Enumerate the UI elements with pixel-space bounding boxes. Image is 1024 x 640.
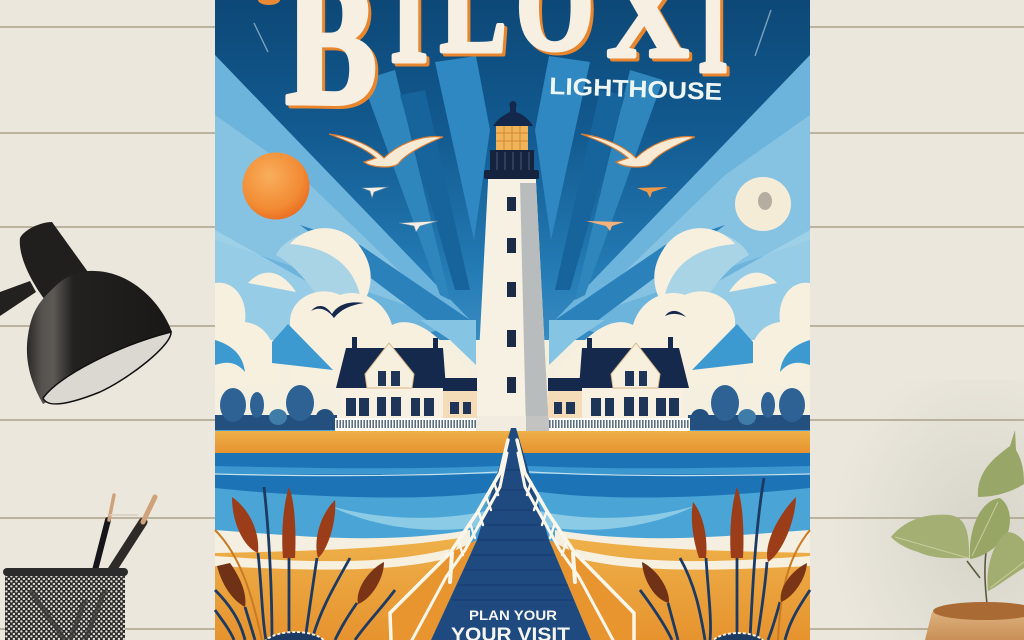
orange sun	[242, 152, 310, 220]
subtitle: LIGHTHOUSE: LIGHTHOUSE	[549, 73, 723, 106]
terracotta pot	[925, 602, 1024, 640]
house left	[335, 337, 477, 431]
right railing	[517, 440, 634, 640]
seagulls	[311, 134, 695, 318]
cream moon ball	[735, 177, 791, 231]
small orange disc at top edge	[258, 0, 280, 5]
title: BILOXI	[285, 0, 728, 142]
house right	[548, 337, 690, 431]
potted plant	[891, 430, 1024, 640]
pebble circle	[711, 633, 765, 640]
desk lamp	[0, 222, 172, 404]
leaves and stem	[891, 430, 1024, 604]
background trees	[215, 385, 337, 430]
lamp opening	[43, 332, 171, 404]
water waves	[215, 453, 810, 555]
sky with sun rays	[215, 0, 810, 440]
decorative faint birds near title	[254, 10, 771, 56]
side panels	[390, 540, 477, 640]
lamp arm	[0, 281, 36, 316]
foreground sand	[215, 538, 810, 640]
mesh cup	[5, 572, 125, 640]
pens	[67, 495, 155, 640]
clouds	[215, 228, 810, 430]
left railing	[390, 440, 508, 640]
walkway deck	[431, 428, 591, 640]
pen holder	[3, 495, 155, 640]
right cattails	[640, 478, 810, 640]
call to action text	[451, 607, 570, 640]
sandy beach strip	[215, 431, 810, 453]
background trees right	[688, 385, 810, 430]
pebble circle	[264, 632, 326, 640]
lantern room	[484, 101, 539, 183]
poster: Biloxi Lighthouse	[215, 0, 810, 640]
lamp neck	[20, 222, 88, 300]
call to action text: PLAN YOUR	[469, 607, 557, 623]
left cattails	[215, 487, 395, 640]
lamp shade	[27, 271, 172, 404]
lighthouse tower	[475, 101, 549, 432]
boardwalk	[390, 428, 634, 640]
